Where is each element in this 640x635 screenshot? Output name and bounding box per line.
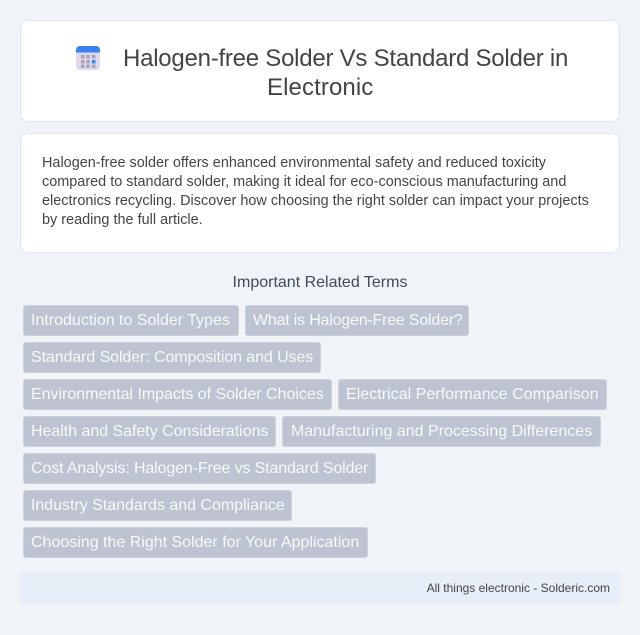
intro paragraph: electronics recycling. Discover how choosing the right solder can impact your projects (42, 193, 589, 209)
tag (282, 416, 601, 447)
intro paragraph: Halogen-free solder offers enhanced environmental safety and reduced toxicity (42, 155, 546, 171)
tag: Introduction to Solder Types (31, 312, 230, 329)
tag: What is Halogen-Free Solder? (253, 312, 463, 329)
intro paragraph: by reading the full article. (42, 212, 203, 228)
intro paragraph: compared to standard solder, making it ideal for eco-conscious manufacturing and (42, 174, 566, 190)
heading: important related terms: Important Related Terms (233, 274, 407, 291)
panel: intro text card (20, 133, 620, 253)
tag (338, 379, 607, 410)
tag (23, 416, 276, 447)
tag (23, 490, 292, 521)
tag (23, 527, 368, 558)
intro paragraph (42, 155, 589, 228)
tag (23, 453, 376, 484)
tag: Environmental Impacts of Solder Choices (31, 386, 324, 403)
tag: Manufacturing and Processing Differences (291, 423, 592, 440)
tag (23, 379, 332, 410)
title (123, 45, 568, 101)
tag: Electrical Performance Comparison (346, 386, 599, 403)
panel: header card (20, 20, 620, 122)
tag: Health and Safety Considerations (31, 423, 268, 440)
tag (23, 342, 321, 373)
icon: calendar (76, 46, 100, 70)
tag: Standard Solder: Composition and Uses (31, 349, 313, 366)
title: Halogen-free Solder Vs Standard Solder in (123, 45, 568, 72)
title: Electronic (267, 74, 373, 101)
tag: Choosing the Right Solder for Your Application (31, 534, 359, 551)
tag (245, 305, 469, 336)
tag: Cost Analysis: Halogen-Free vs Standard Solder (31, 460, 368, 477)
tag (23, 305, 239, 336)
footer bar (20, 571, 620, 605)
tag: Industry Standards and Compliance (31, 497, 285, 514)
footer text: All things electronic - Solderic.com (427, 581, 610, 595)
panel: related term tags (23, 305, 607, 558)
